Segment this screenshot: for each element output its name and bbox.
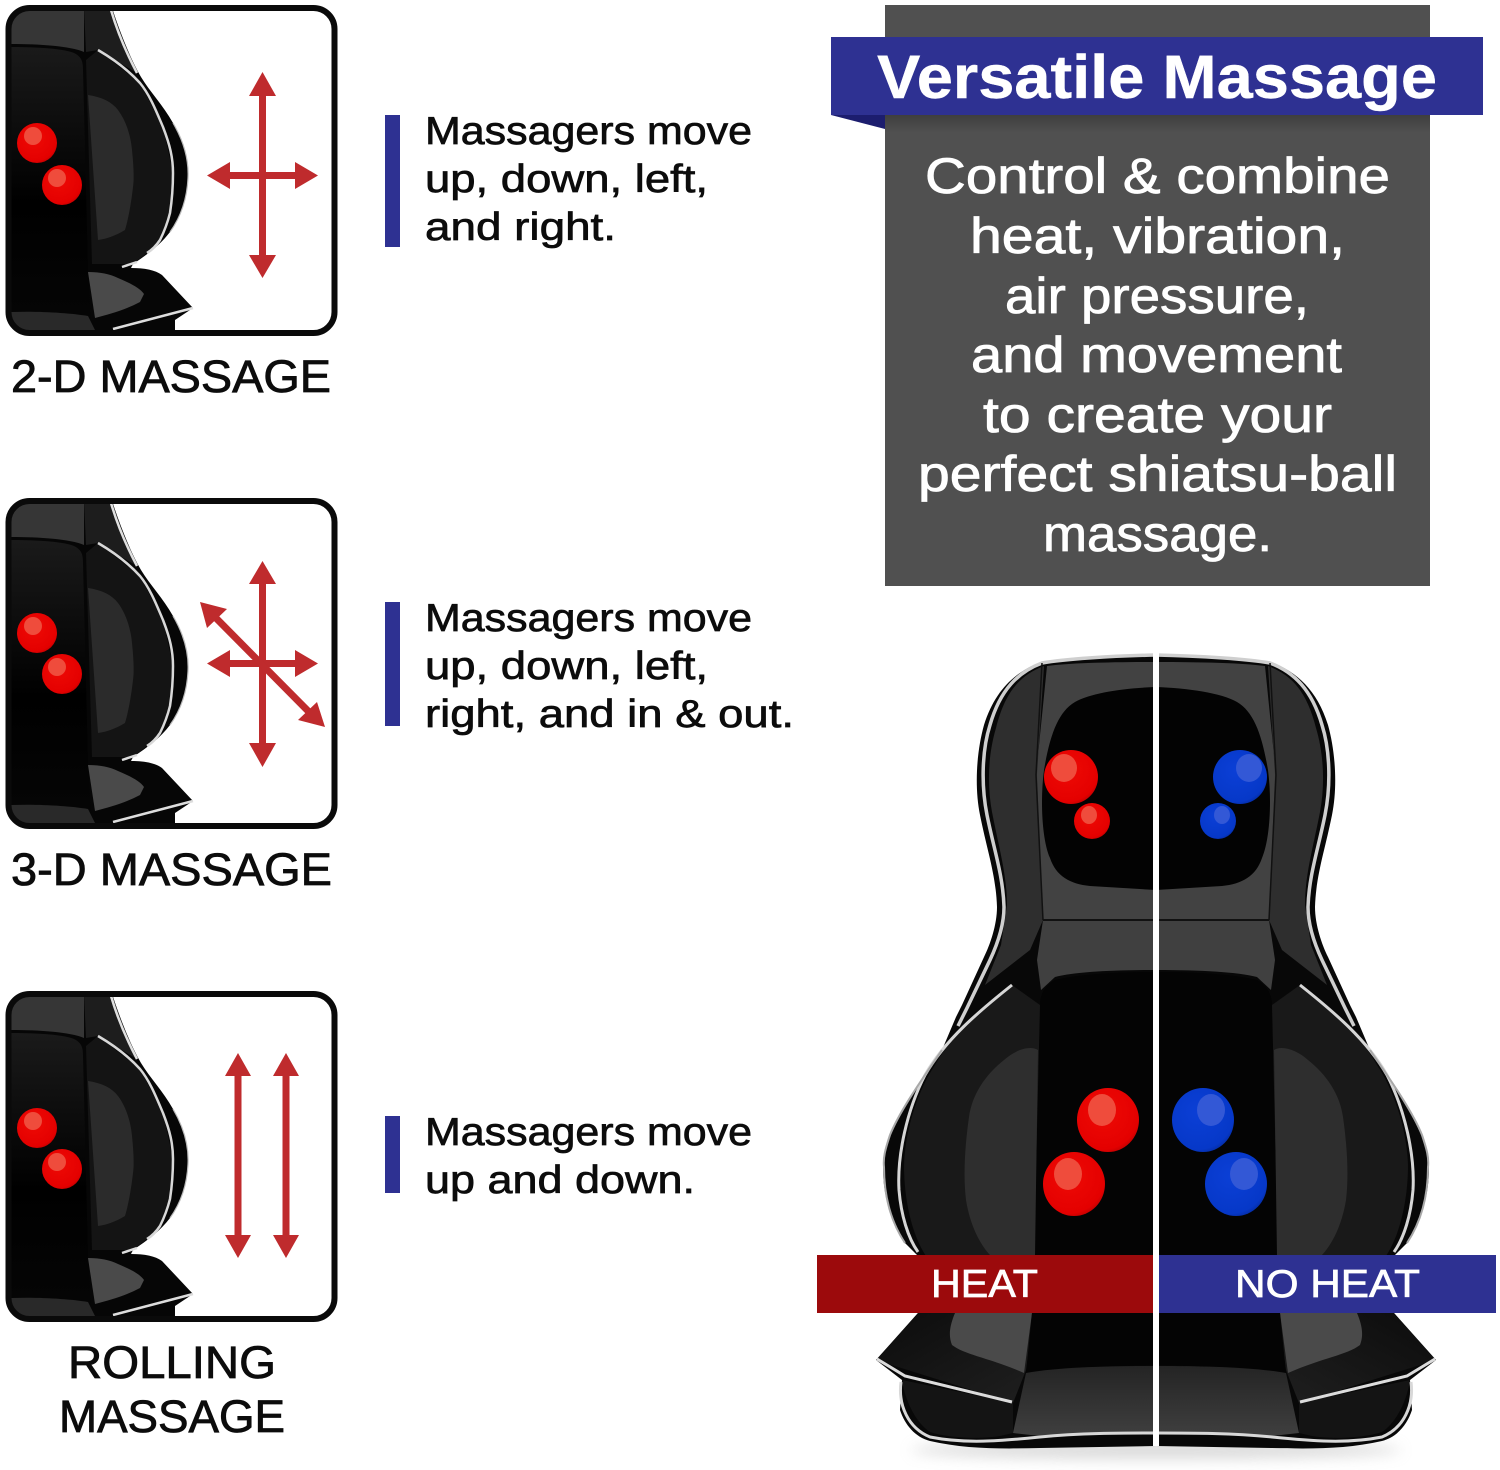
seat ground shadow — [911, 1441, 1401, 1459]
description: rolling: Massagers move — [425, 1111, 752, 1154]
description: 3-D: Massagers move — [425, 597, 752, 640]
massage balls: unheated blue — [1172, 750, 1267, 1216]
callout body text: massage. — [1043, 506, 1272, 562]
label: rolling massage: ROLLING — [68, 1337, 276, 1388]
label: rolling massage — [59, 1337, 285, 1442]
accent bar — [385, 115, 400, 247]
panel: 2-D massage — [8, 8, 752, 402]
callout body text — [918, 148, 1397, 562]
grey background — [885, 5, 1430, 586]
seat comparison: heat vs no heat — [817, 650, 1496, 1459]
description: 3-D — [425, 597, 794, 736]
banner — [831, 37, 1483, 115]
description: 2-D: Massagers move — [425, 110, 752, 153]
seat: right half — [1156, 654, 1436, 1448]
description: rolling: up and down. — [425, 1159, 695, 1202]
title: Versatile Massage — [877, 43, 1437, 111]
label: 2-D massage: 2-D MASSAGE — [11, 351, 331, 402]
heat banner — [817, 1255, 1153, 1313]
no heat banner: NO HEAT — [1235, 1263, 1420, 1306]
callout body text: Control & combine — [925, 148, 1390, 204]
panel: versatile massage callout — [831, 5, 1483, 586]
no heat banner — [1159, 1255, 1496, 1313]
description: 2-D — [425, 110, 752, 249]
illustration: seat side view with rolling arrows — [8, 994, 334, 1319]
description: 2-D: and right. — [425, 206, 616, 249]
illustration: seat side view with 2-D arrows — [8, 8, 334, 333]
seat: left half — [876, 654, 1156, 1448]
label: 3-D massage: 3-D MASSAGE — [11, 844, 332, 895]
accent bar — [385, 602, 400, 726]
accent bar — [385, 1116, 400, 1193]
callout body text: and movement — [971, 327, 1342, 383]
callout body text: to create your — [983, 387, 1332, 443]
description: 3-D: up, down, left, — [425, 645, 708, 688]
banner fold — [831, 115, 885, 129]
label: rolling massage: MASSAGE — [59, 1391, 285, 1442]
panel: 3-D massage — [8, 501, 794, 895]
massage balls: heated red — [1043, 750, 1139, 1216]
callout body text: perfect shiatsu-ball — [918, 446, 1397, 502]
divider line — [1153, 650, 1159, 1446]
callout body text: heat, vibration, — [970, 208, 1345, 264]
description: 3-D: right, and in & out. — [425, 693, 794, 736]
illustration: seat side view with 3-D arrows — [8, 501, 334, 826]
heat banner: HEAT — [931, 1263, 1038, 1306]
panel: rolling massage — [8, 994, 752, 1442]
description: rolling — [425, 1111, 752, 1202]
banner shadow — [885, 115, 1430, 133]
description: 2-D: up, down, left, — [425, 158, 708, 201]
callout body text: air pressure, — [1005, 268, 1309, 324]
